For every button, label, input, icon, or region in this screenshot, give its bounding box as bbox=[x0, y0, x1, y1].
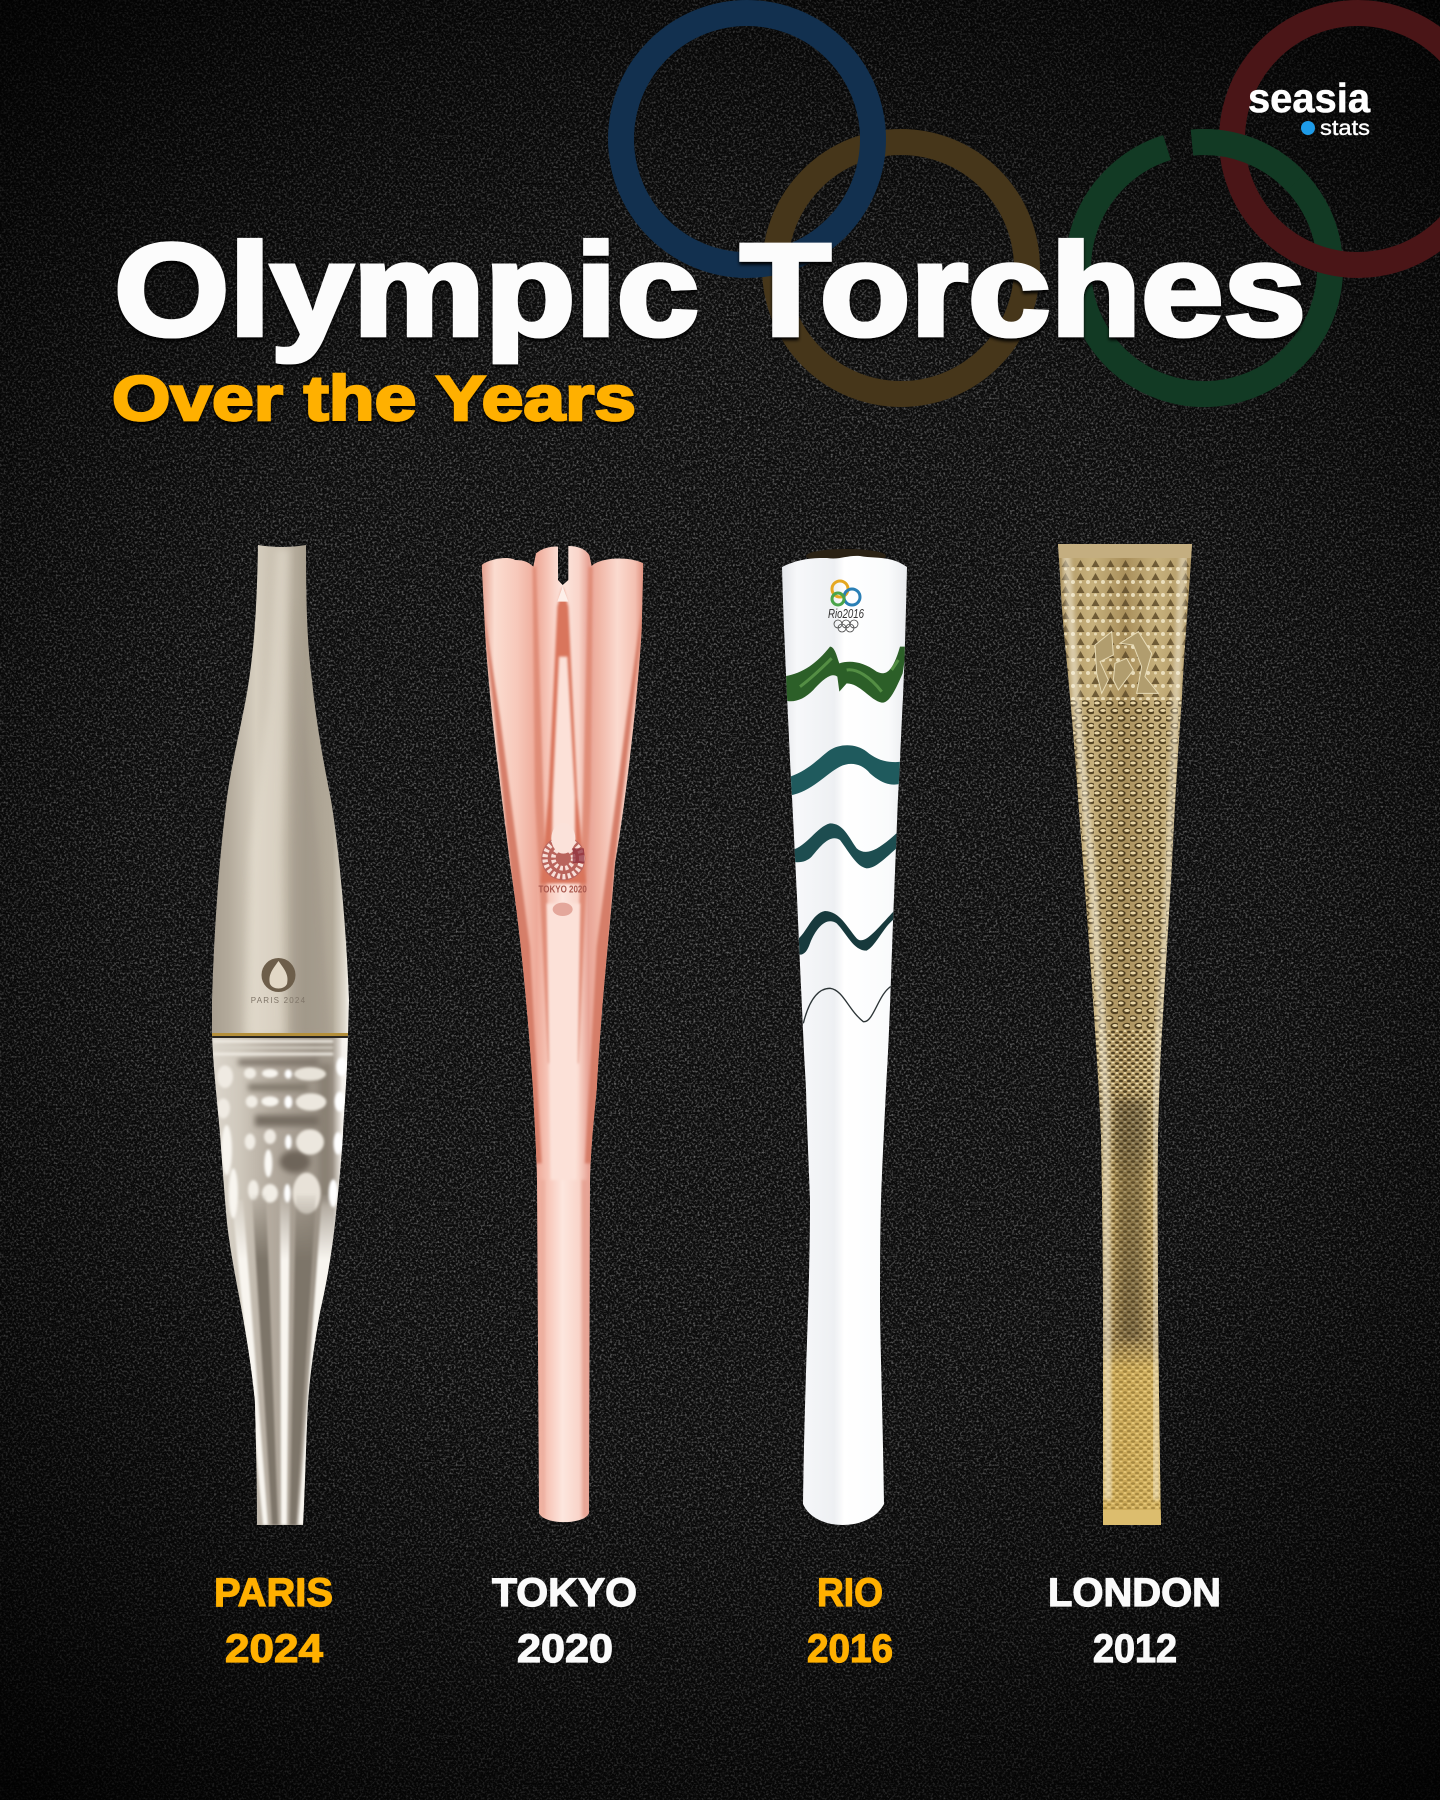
label: Paris 2024 bbox=[214, 1571, 333, 1671]
wave teal bbox=[788, 745, 903, 796]
wave teal dark bbox=[792, 823, 898, 868]
label: Tokyo 2020: TOKYO bbox=[492, 1571, 637, 1615]
label: Paris 2024: 2024 bbox=[225, 1627, 324, 1671]
wave green bbox=[783, 647, 907, 703]
label: Tokyo 2020: 2020 bbox=[517, 1627, 613, 1671]
emblem: Rio 2016: Rio2016 bbox=[828, 606, 865, 621]
emblem: London 2012 bbox=[1095, 632, 1158, 693]
emblem: Tokyo 2020 bbox=[538, 823, 587, 916]
emblem: Rio 2016 bbox=[828, 581, 865, 632]
label: Tokyo 2020 bbox=[492, 1571, 637, 1671]
center shaft bbox=[541, 587, 586, 883]
inner facets bbox=[533, 567, 553, 1063]
olympic rings bbox=[621, 13, 1440, 394]
label: Rio 2016: 2016 bbox=[807, 1627, 893, 1671]
wave dark bbox=[797, 908, 897, 955]
label: Rio 2016 bbox=[807, 1571, 893, 1671]
emblem: Paris 2024: PARIS 2024 bbox=[251, 996, 306, 1005]
logo: seasia stats: seasia bbox=[1248, 75, 1371, 121]
label: London 2012 bbox=[1048, 1571, 1221, 1671]
emblem: Tokyo 2020: TOKYO 2020 bbox=[538, 885, 587, 896]
logo: seasia stats bbox=[1248, 75, 1371, 140]
hammered metal bbox=[213, 1040, 347, 1218]
torch: Paris 2024 bbox=[205, 540, 355, 1531]
label: London 2012: 2012 bbox=[1093, 1627, 1177, 1671]
lower streaks bbox=[232, 1190, 342, 1525]
title: Olympic Torches bbox=[114, 216, 1306, 363]
label: Rio 2016: RIO bbox=[817, 1571, 883, 1615]
label: London 2012: LONDON bbox=[1048, 1571, 1221, 1615]
torch: Tokyo 2020 bbox=[480, 543, 647, 1527]
subtitle: Over the Years bbox=[112, 364, 636, 434]
logo: seasia stats: stats bbox=[1320, 117, 1370, 140]
label: Paris 2024: PARIS bbox=[214, 1571, 333, 1615]
torch: Rio 2016 bbox=[782, 549, 907, 1525]
wave thin bbox=[803, 986, 892, 1023]
torch: London 2012 bbox=[1058, 544, 1192, 1525]
emblem: Paris 2024 bbox=[251, 958, 306, 1005]
outer salmon wedges bbox=[483, 603, 542, 1163]
